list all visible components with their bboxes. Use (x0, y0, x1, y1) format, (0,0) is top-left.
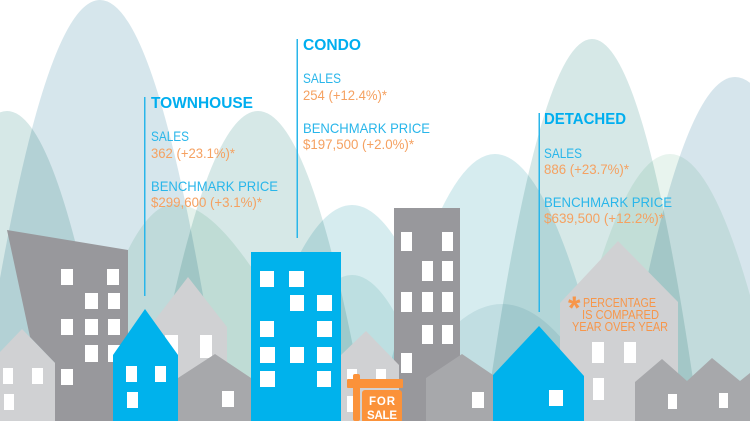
detached: blue house (493, 326, 584, 421)
townhouse leader line (144, 97, 146, 296)
for sale sign (347, 374, 403, 421)
detached stats: SALES (544, 145, 582, 161)
callout: percentage note: IS COMPARED (582, 308, 659, 322)
callout: percentage note (568, 290, 668, 334)
detached stats: DETACHED (544, 111, 626, 128)
callout: percentage note: * (568, 290, 581, 326)
building: light house left (0, 329, 55, 421)
building: grey tower (394, 208, 460, 421)
condo stats: SALES (303, 70, 341, 86)
townhouse stats: TOWNHOUSE (151, 95, 253, 112)
townhouse stats: $299,600 (+3.1%)* (151, 194, 263, 210)
condo: blue tower (251, 252, 341, 421)
condo stats: 254 (+12.4%)* (303, 87, 388, 103)
building: grey house (178, 354, 251, 421)
building: light house centre (341, 331, 399, 421)
detached stats: $639,500 (+12.2%)* (544, 210, 665, 226)
callout: percentage note: PERCENTAGE (583, 296, 656, 310)
detached stats (544, 111, 672, 226)
for sale sign: FOR (369, 396, 396, 408)
condo stats: BENCHMARK PRICE (303, 120, 430, 136)
building: large light house (560, 241, 678, 421)
condo leader line (296, 39, 298, 238)
townhouse stats: 362 (+23.1%)* (151, 145, 236, 161)
detached leader line (538, 113, 540, 312)
townhouse: blue house (113, 309, 178, 421)
townhouse stats: SALES (151, 128, 189, 144)
detached stats: BENCHMARK PRICE (544, 194, 672, 210)
condo stats: CONDO (303, 37, 361, 54)
townhouse stats: BENCHMARK PRICE (151, 178, 278, 194)
townhouse stats (151, 95, 278, 210)
callout: percentage note: YEAR OVER YEAR (572, 320, 668, 334)
detached stats: 886 (+23.7%)* (544, 161, 630, 177)
building: grey house right of tower (426, 354, 493, 421)
condo stats: $197,500 (+2.0%)* (303, 136, 415, 152)
condo stats (303, 37, 430, 152)
building: dark slanted tower (7, 230, 128, 421)
buildings: grey row houses right (635, 358, 750, 421)
building: light house behind townhouse (155, 277, 227, 421)
